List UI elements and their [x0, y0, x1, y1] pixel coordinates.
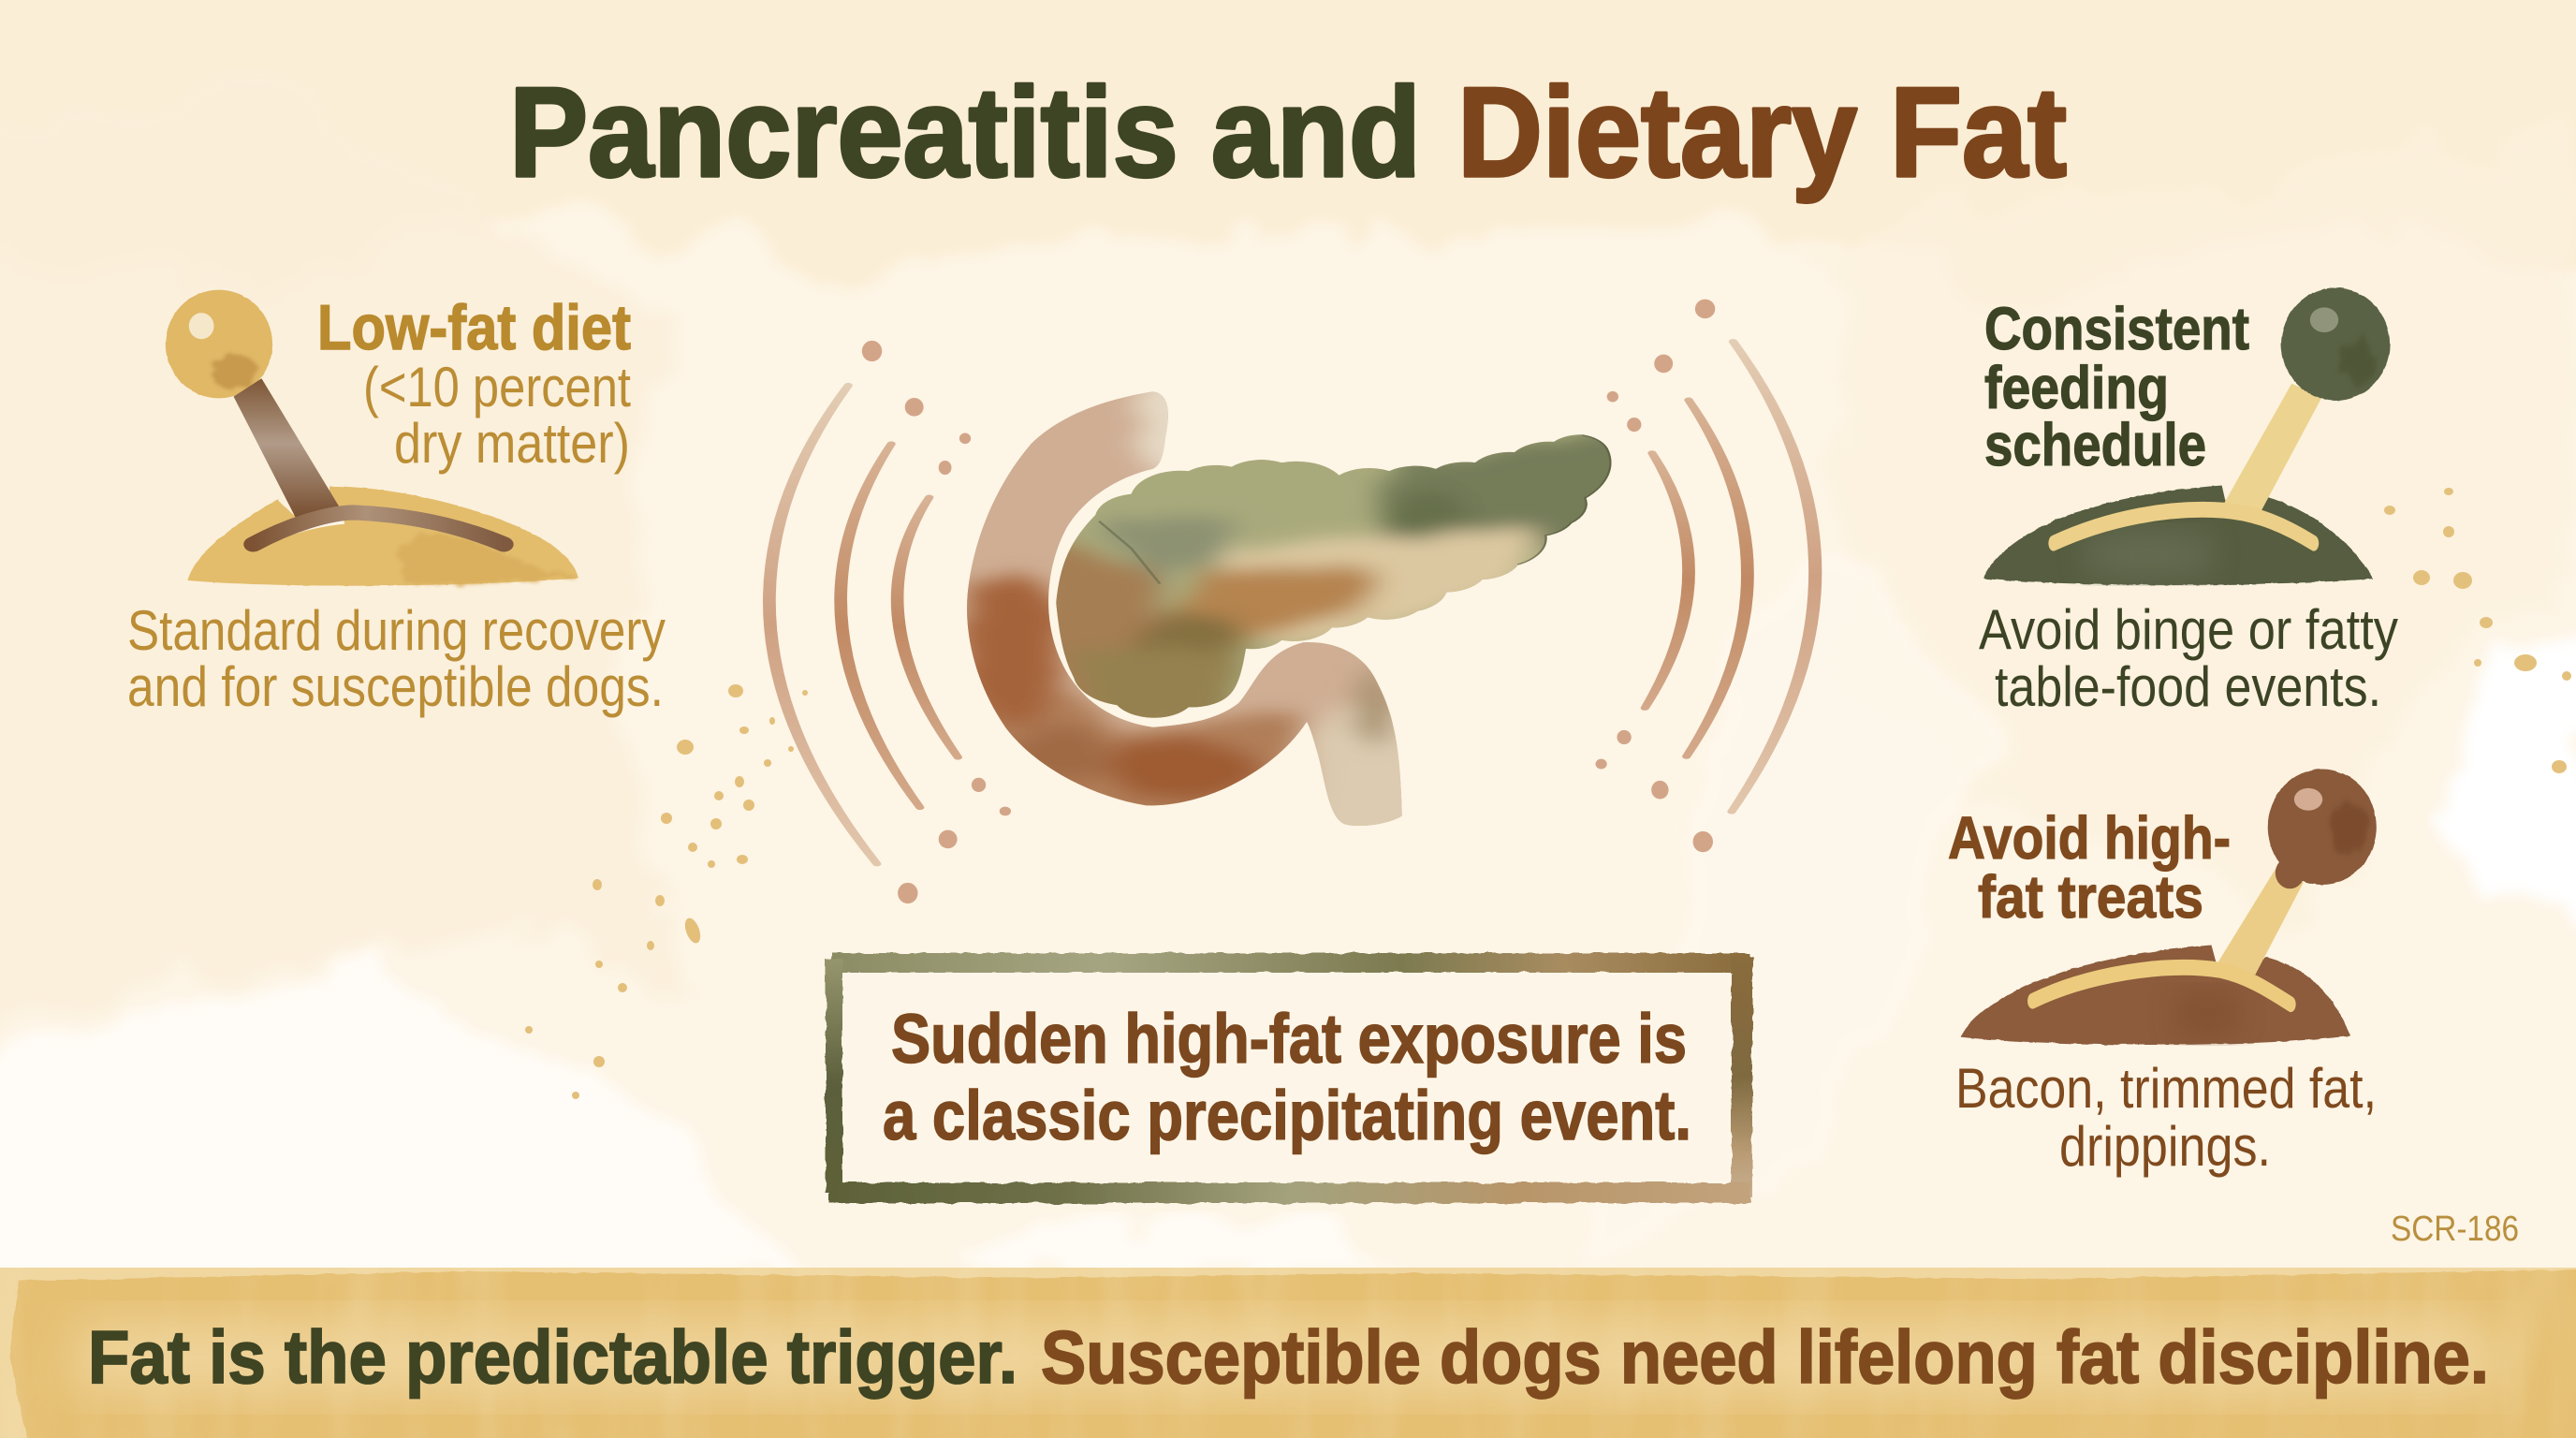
- text: low-fat description: Standard during recovery: [127, 599, 666, 662]
- text: low-fat description: [127, 599, 666, 718]
- organ: duodenum: [967, 391, 1402, 826]
- heading: avoid high-fat treats: Avoid high-: [1948, 804, 2231, 872]
- title: Dietary Fat: [1457, 61, 2067, 203]
- text: schedule description: [1979, 598, 2398, 718]
- heading: avoid high-fat treats: fat treats: [1978, 863, 2203, 931]
- arcs: right radiating lines: [1645, 342, 1818, 812]
- panel: low-fat diet lever: [127, 290, 666, 718]
- heading: consistent feeding schedule: schedule: [1984, 411, 2206, 478]
- panel: avoid high-fat treats: [1948, 770, 2377, 1178]
- text: low-fat detail: (<10 percent: [363, 356, 631, 418]
- title: [509, 61, 2067, 203]
- text: treats description: [1955, 1057, 2377, 1178]
- heading: consistent feeding schedule: feeding: [1984, 354, 2169, 421]
- heading: consistent feeding schedule: [1984, 295, 2249, 478]
- arcs: left radiating lines: [768, 386, 958, 864]
- organ: pancreas body: [1056, 434, 1612, 718]
- heading: low-fat diet: Low-fat diet: [317, 292, 631, 363]
- title: Pancreatitis and: [509, 61, 1421, 203]
- dots: radiating particles: [862, 300, 1715, 903]
- footer band: [0, 1268, 2576, 1438]
- callout interior: [843, 973, 1731, 1181]
- heading: consistent feeding schedule: Consistent: [1984, 295, 2249, 362]
- illustration: pancreas with radiating arcs: [768, 300, 1818, 903]
- icon: brown lever: [1961, 770, 2377, 1045]
- heading: avoid high-fat treats: [1948, 804, 2231, 931]
- panel: consistent feeding schedule: [1979, 287, 2398, 718]
- callout text: a classic precipitating event.: [883, 1077, 1691, 1154]
- text: low-fat description: and for susceptible dogs.: [127, 655, 664, 718]
- callout text: [883, 1000, 1691, 1154]
- text: treats description: drippings.: [2059, 1115, 2271, 1178]
- callout text: Sudden high-fat exposure is: [891, 1000, 1687, 1078]
- footer message: Fat is the predictable trigger.: [88, 1315, 1017, 1399]
- icon: gold lever: [166, 290, 578, 586]
- splatter: right gold droplets: [2384, 488, 2571, 773]
- text: treats description: Bacon, trimmed fat,: [1955, 1057, 2377, 1120]
- text: schedule description: table-food events.: [1995, 655, 2381, 718]
- icon: olive lever: [1983, 287, 2390, 585]
- callout: sudden high-fat exposure: [826, 953, 1752, 1203]
- text: low-fat detail: [363, 356, 631, 475]
- callout frame: [826, 953, 1752, 1203]
- splatter: left gold droplets: [525, 684, 808, 1099]
- text: low-fat detail: dry matter): [394, 412, 630, 475]
- footer message: [88, 1315, 2489, 1399]
- reference code: SCR-186: [2391, 1210, 2519, 1249]
- text: schedule description: Avoid binge or fatty: [1979, 598, 2398, 661]
